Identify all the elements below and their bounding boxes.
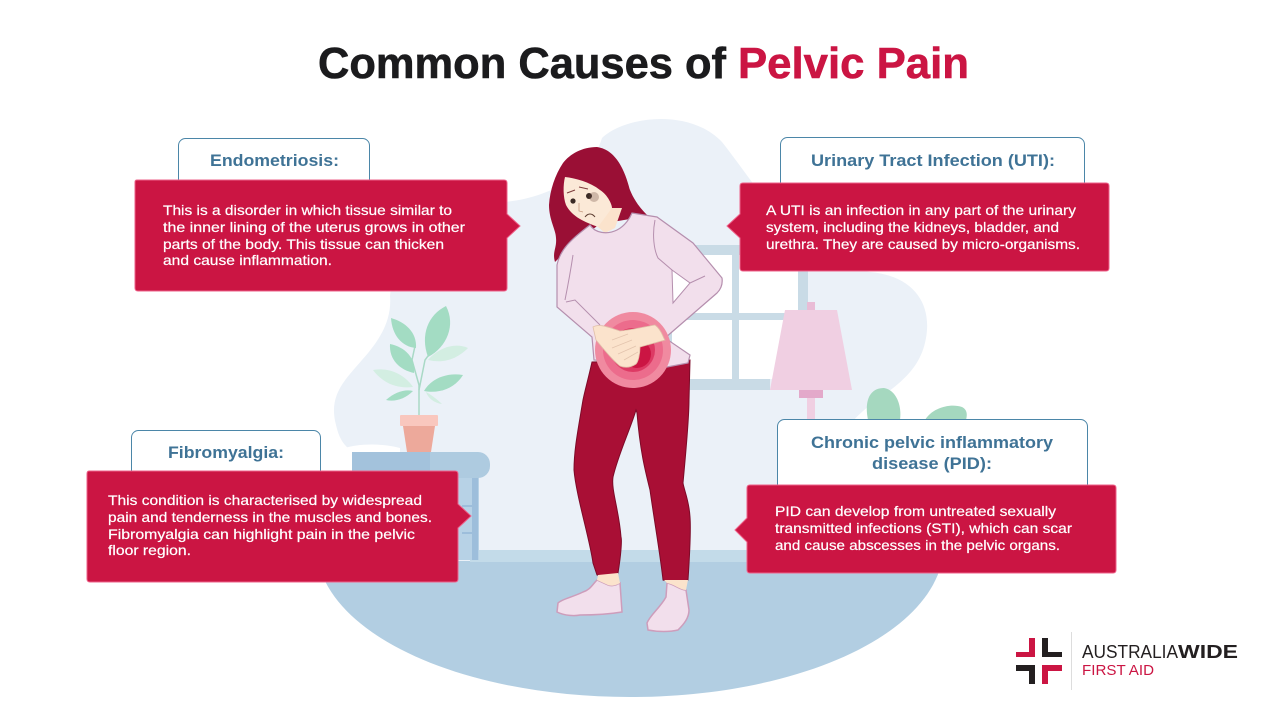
heading tab: Urinary Tract Infection (UTI): bbox=[811, 152, 1055, 170]
body text: the inner lining of the uterus grows in other bbox=[163, 220, 466, 235]
drawer cabinet bbox=[352, 452, 490, 560]
body text: urethra. They are caused by micro-organisms. bbox=[766, 237, 1080, 252]
ankle skin bbox=[597, 573, 620, 586]
logo bbox=[1016, 632, 1238, 690]
body text: and cause abscesses in the pelvic organs. bbox=[775, 538, 1060, 553]
pain glow bbox=[595, 312, 671, 388]
logo wordmark: FIRST AID bbox=[1082, 662, 1154, 679]
hair back bbox=[549, 147, 648, 262]
floor bbox=[318, 561, 942, 697]
woman figure bbox=[549, 147, 722, 632]
body text: This is a disorder in which tissue similar to bbox=[163, 203, 452, 218]
white patch by drawer bbox=[338, 444, 400, 452]
body text bbox=[108, 493, 432, 558]
heading tab bbox=[780, 138, 1084, 192]
red panel bbox=[135, 180, 520, 291]
body text: parts of the body. This tissue can thicken bbox=[163, 237, 444, 252]
lamp bbox=[770, 302, 852, 428]
red panel bbox=[727, 183, 1109, 271]
heading tab bbox=[778, 420, 1088, 494]
sweater bbox=[557, 213, 722, 367]
potted plant bbox=[373, 306, 468, 452]
heading tab: disease (PID): bbox=[872, 455, 992, 473]
trousers bbox=[574, 360, 690, 582]
body text bbox=[766, 203, 1080, 252]
title bbox=[318, 39, 969, 88]
red panel bbox=[87, 471, 471, 582]
face details bbox=[567, 187, 599, 217]
body text: pain and tenderness in the muscles and bones. bbox=[108, 510, 432, 525]
body text: This condition is characterised by widespread bbox=[108, 493, 422, 508]
card: endometriosis bbox=[135, 138, 520, 291]
body text: floor region. bbox=[108, 543, 191, 558]
logo wordmark: AUSTRALIA bbox=[1082, 642, 1178, 662]
card: urinary tract infection bbox=[727, 138, 1109, 271]
gap between arm and body bbox=[672, 270, 690, 303]
heading tab: Chronic pelvic inflammatory bbox=[811, 434, 1054, 452]
body text: A UTI is an infection in any part of the urinary bbox=[766, 203, 1076, 218]
background plant bbox=[867, 388, 967, 420]
card: fibromyalgia bbox=[87, 430, 471, 582]
body text: Fibromyalgia can highlight pain in the pelvic bbox=[108, 527, 415, 542]
window bbox=[665, 245, 808, 391]
neck and face bbox=[564, 177, 612, 228]
body text: PID can develop from untreated sexually bbox=[775, 504, 1056, 519]
icon: cross mark bbox=[1016, 638, 1062, 684]
heading tab: Fibromyalgia: bbox=[168, 444, 284, 462]
heading tab: Endometriosis: bbox=[210, 152, 339, 170]
hands bbox=[593, 325, 665, 367]
card: chronic pelvic inflammatory disease bbox=[735, 420, 1116, 573]
body text: and cause inflammation. bbox=[163, 253, 332, 268]
body text: system, including the kidneys, bladder, and bbox=[766, 220, 1059, 235]
background scene bbox=[318, 119, 967, 697]
heading tab bbox=[132, 430, 320, 480]
wall blob bbox=[318, 119, 940, 562]
body text bbox=[775, 504, 1073, 553]
body text bbox=[163, 203, 466, 268]
logo wordmark bbox=[1082, 642, 1238, 679]
body text: transmitted infections (STI), which can scar bbox=[775, 521, 1073, 536]
title: Pelvic Pain bbox=[738, 39, 969, 88]
logo wordmark: WIDE bbox=[1178, 642, 1238, 662]
shoes bbox=[557, 580, 622, 616]
heading tab bbox=[178, 138, 370, 188]
title: Common Causes of bbox=[318, 39, 726, 88]
red panel bbox=[735, 485, 1116, 573]
